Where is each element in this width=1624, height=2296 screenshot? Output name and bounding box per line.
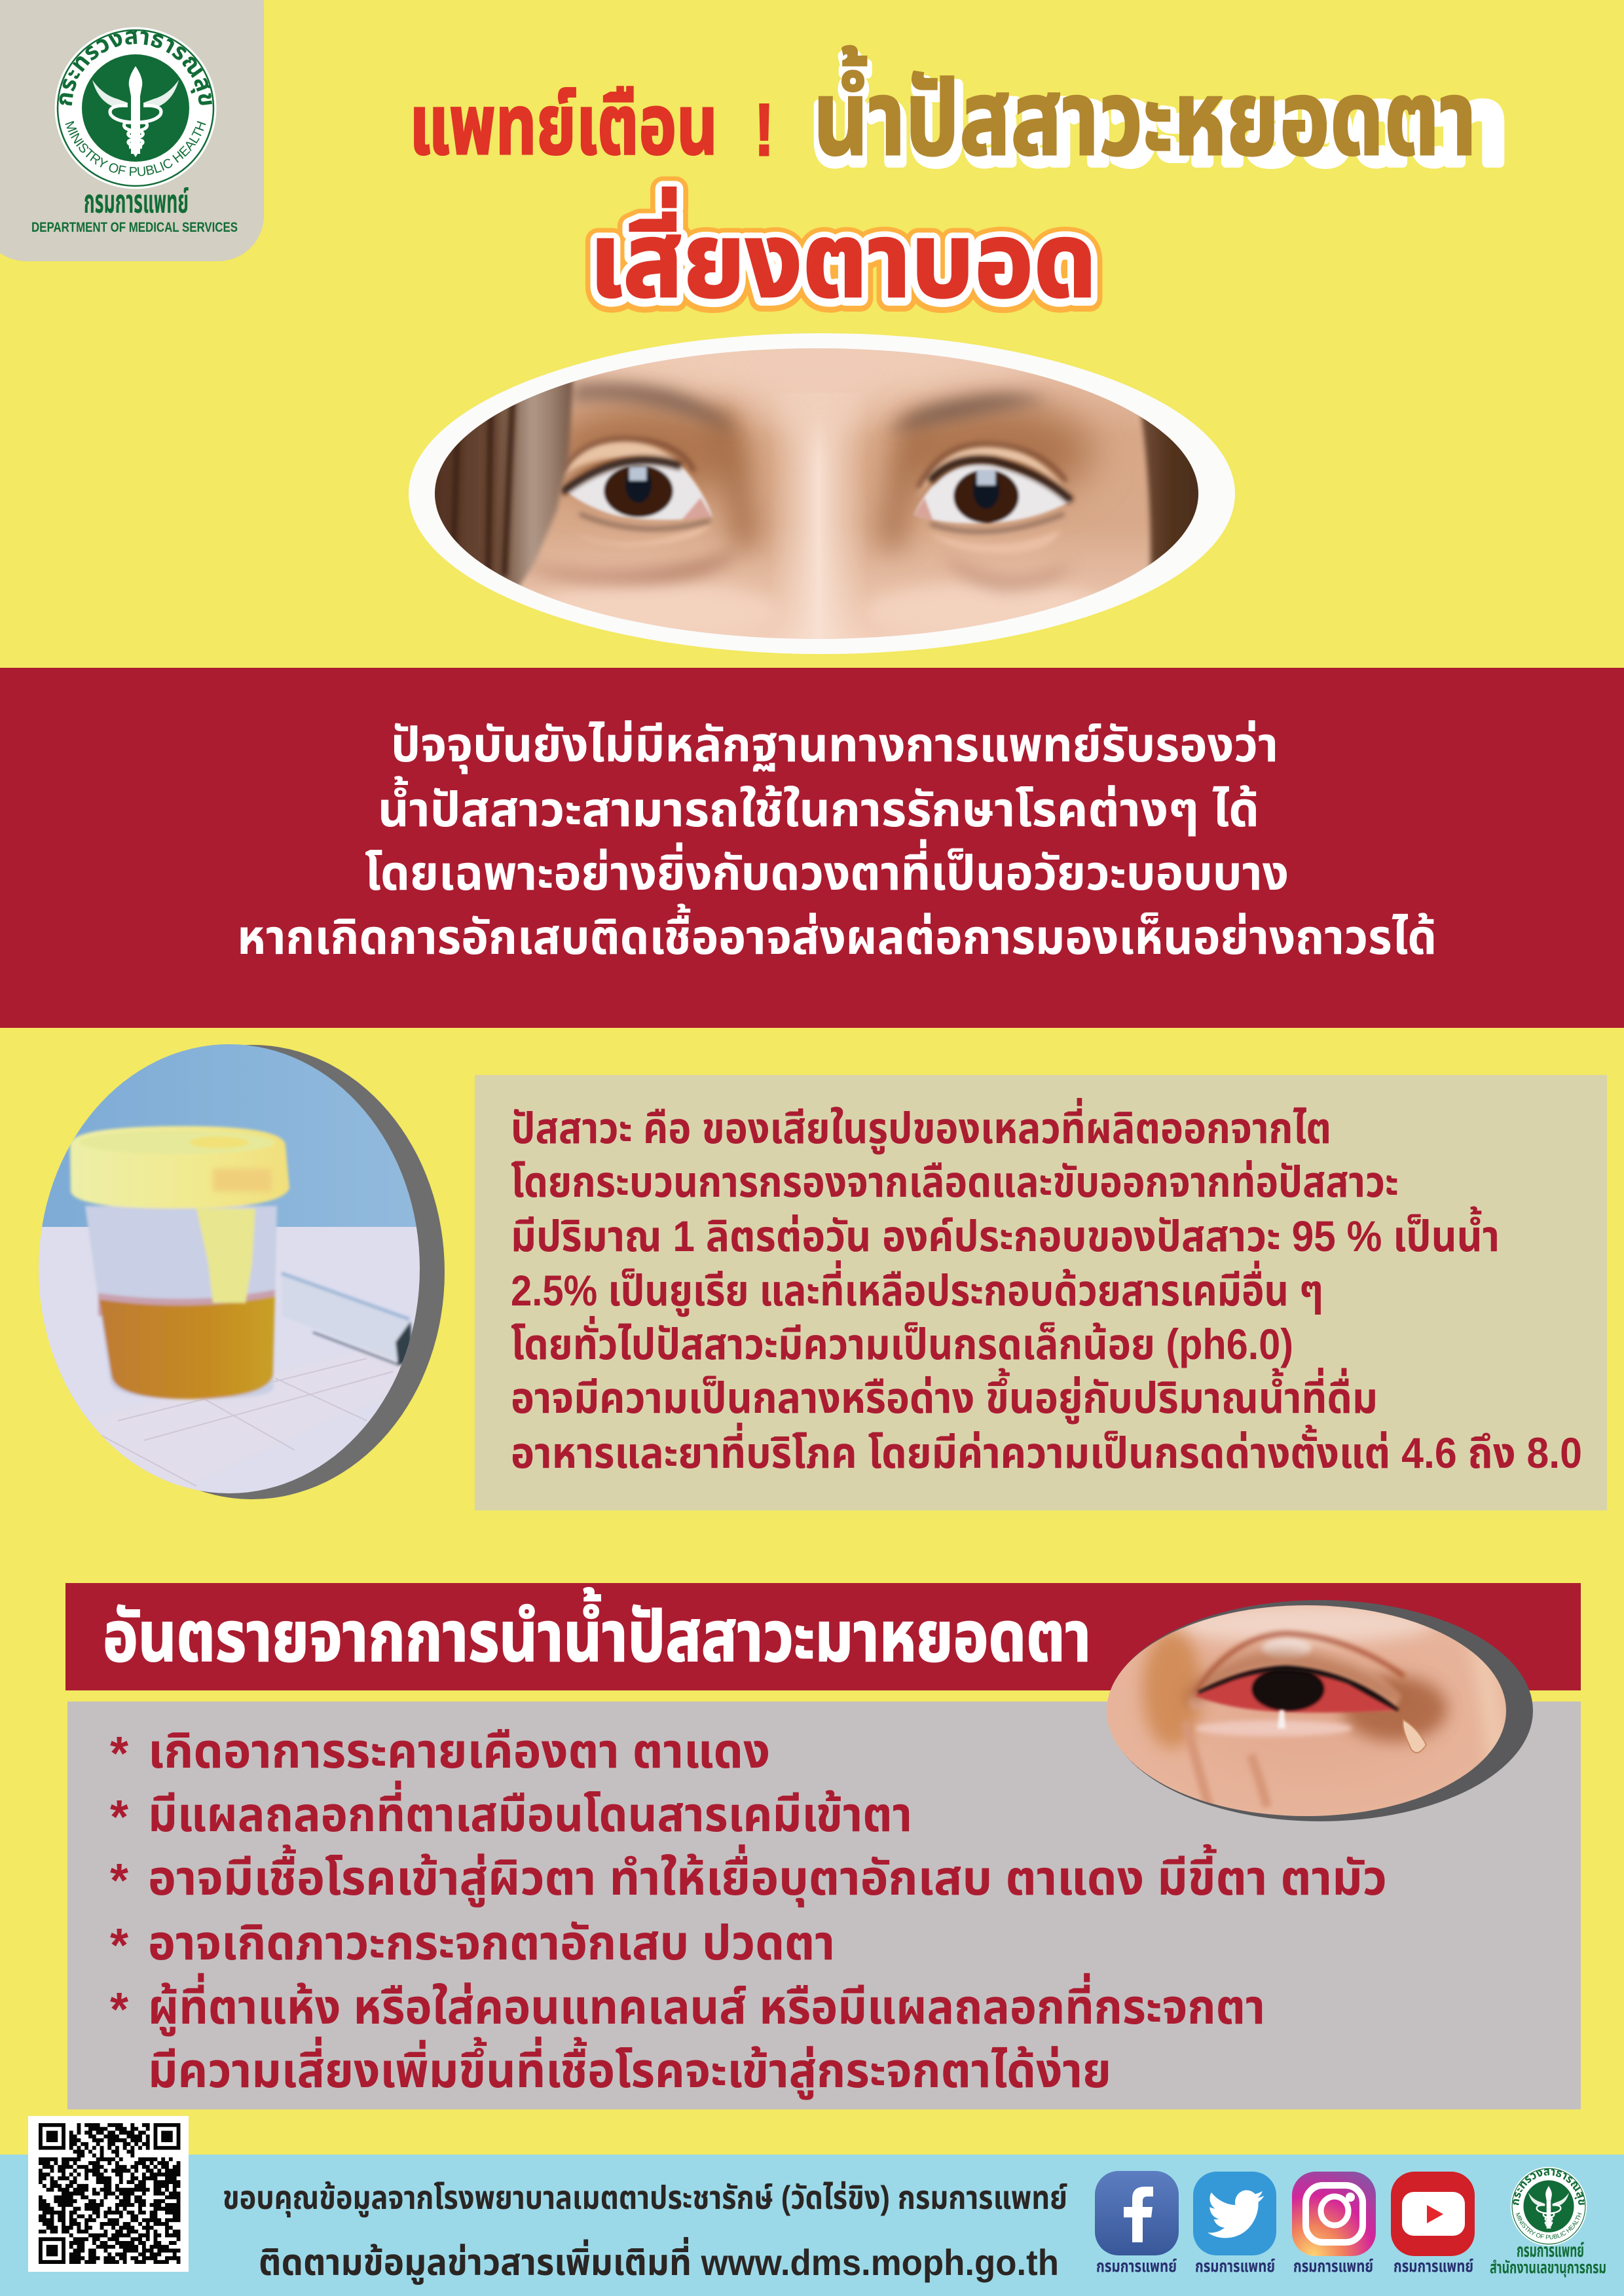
- panel: footer: [0, 2155, 1624, 2296]
- bullet 4: *: [110, 1920, 128, 1972]
- facts line 5: โดยทั่วไปปัสสาวะมีความเป็นกรดเล็กน้อย (ph6.0): [511, 1315, 1293, 1368]
- logo text: department English: DEPARTMENT OF MEDICAL SERVICES: [31, 220, 238, 235]
- right eye: [917, 443, 1066, 494]
- panel: warning statement: [0, 668, 1624, 1028]
- footer website line: ติดตามข้อมูลข่าวสารเพิ่มเติมที่ www.dms.moph.go.th: [259, 2236, 1059, 2285]
- facts line 4: 2.5% เป็นยูเรีย และที่เหลือประกอบด้วยสารเคมีอื่น ๆ: [511, 1260, 1323, 1317]
- icon: small ministry seal: [1510, 2167, 1587, 2246]
- QR code: [28, 2116, 189, 2272]
- title: risk of blindness: เสี่ยงตาบอด: [589, 189, 1097, 320]
- bullet 4: อาจเกิดภาวะกระจกตาอักเสบ ปวดตา: [148, 1916, 835, 1970]
- statement line 1: ปัจจุบันยังไม่มีหลักฐานทางการแพทย์รับรองว่า: [391, 718, 1278, 774]
- danger heading: อันตรายจากการนำน้ำปัสสาวะมาหยอดตา: [103, 1588, 1091, 1676]
- bullet 1: เกิดอาการระคายเคืองตา ตาแดง: [148, 1724, 770, 1778]
- photo: urine sample cup: [33, 1041, 445, 1502]
- bullet 2: มีแผลถลอกที่ตาเสมือนโดนสารเคมีเข้าตา: [148, 1781, 912, 1842]
- icon: small ministry seal: กระทรวงสาธารณสุข: [1513, 2168, 1585, 2205]
- icon: small ministry seal: MINISTRY OF PUBLIC HEALTH: [1515, 2213, 1582, 2239]
- title: doctor warning: !: [754, 89, 774, 171]
- panel: danger list: [67, 1702, 1581, 2109]
- label: twitter: กรมการแพทย์: [1195, 2256, 1275, 2276]
- title: doctor warning: แพทย์เตือน: [409, 79, 718, 172]
- hair: [435, 381, 576, 587]
- bullet 5: ผู้ที่ตาแห้ง หรือใส่คอนแทคเลนส์ หรือมีแผลถลอกที่กระจกตา: [148, 1973, 1265, 2037]
- facts line 2: โดยกระบวนการกรองจากเลือดและขับออกจากท่อปัสสาวะ: [511, 1157, 1399, 1206]
- icon: twitter: [1193, 2172, 1276, 2255]
- icon: instagram: [1292, 2172, 1376, 2256]
- photo: woman's eyes: [409, 327, 1235, 655]
- facts line 3: มีปริมาณ 1 ลิตรต่อวัน องค์ประกอบของปัสสาวะ 95 % เป็นน้ำ: [511, 1206, 1500, 1260]
- label: instagram: กรมการแพทย์: [1293, 2256, 1373, 2276]
- label: facebook: กรมการแพทย์: [1096, 2256, 1177, 2276]
- bullet 5: *: [110, 1984, 128, 2036]
- bullet 2: *: [110, 1791, 128, 1844]
- icon: ministry seal: กระทรวงสาธารณสุข: [59, 31, 212, 106]
- icon: ministry seal: MINISTRY OF PUBLIC HEALTH: [65, 120, 206, 176]
- bullet 3: *: [110, 1855, 128, 1907]
- panel: danger header: [65, 1583, 1581, 1690]
- icon: ministry seal: [55, 27, 216, 189]
- statement line 4: หากเกิดการอักเสบติดเชื้ออาจส่งผลต่อการมองเห็นอย่างถาวรได้: [237, 903, 1437, 964]
- panel: urine facts: [475, 1075, 1607, 1510]
- icon: youtube: [1391, 2172, 1475, 2256]
- eyebrows: [572, 384, 737, 432]
- bullet 1: *: [110, 1728, 128, 1780]
- label: youtube: กรมการแพทย์: [1393, 2256, 1473, 2276]
- icon: facebook: [1095, 2171, 1179, 2255]
- left eye: [564, 438, 698, 486]
- title: risk of blindness: เสี่ยงตาบอด: [589, 187, 1097, 319]
- title: urine eye drops: น้ำปัสสาวะหยอดตา: [813, 46, 1477, 177]
- label: department: กรมการแพทย์: [1517, 2240, 1584, 2261]
- title: risk of blindness: เสี่ยงตาบอด: [589, 189, 1097, 321]
- facts line 6: อาจมีความเป็นกลางหรือด่าง ขึ้นอยู่กับปริมาณน้ำที่ดื่ม: [511, 1368, 1378, 1424]
- panel: logo: [0, 0, 264, 261]
- footer credit: ขอบคุณข้อมูลจากโรงพยาบาลเมตตาประชารักษ์ (วัดไร่ขิง) กรมการแพทย์: [223, 2179, 1067, 2217]
- logo text: department Thai: กรมการแพทย์: [84, 183, 189, 220]
- bullet 5 continued: มีความเสี่ยงเพิ่มขึ้นที่เชื้อโรคจะเข้าสู่กระจกตาได้ง่าย: [148, 2037, 1111, 2100]
- title: urine eye drops: น้ำปัสสาวะหยอดตา: [812, 54, 1506, 185]
- statement line 3: โดยเฉพาะอย่างยิ่งกับดวงตาที่เป็นอวัยวะบอบบาง: [365, 839, 1289, 900]
- statement line 2: น้ำปัสสาวะสามารถใช้ในการรักษาโรคต่างๆ ได้: [378, 776, 1259, 837]
- facts line 1: ปัสสาวะ คือ ของเสียในรูปของเหลวที่ผลิตออกจากไต: [511, 1098, 1331, 1154]
- bullet 3: อาจมีเชื้อโรคเข้าสู่ผิวตา ทำให้เยื่อบุตาอักเสบ ตาแดง มีขี้ตา ตามัว: [148, 1844, 1387, 1908]
- photo: inflamed tearing eye: [1107, 1600, 1533, 1821]
